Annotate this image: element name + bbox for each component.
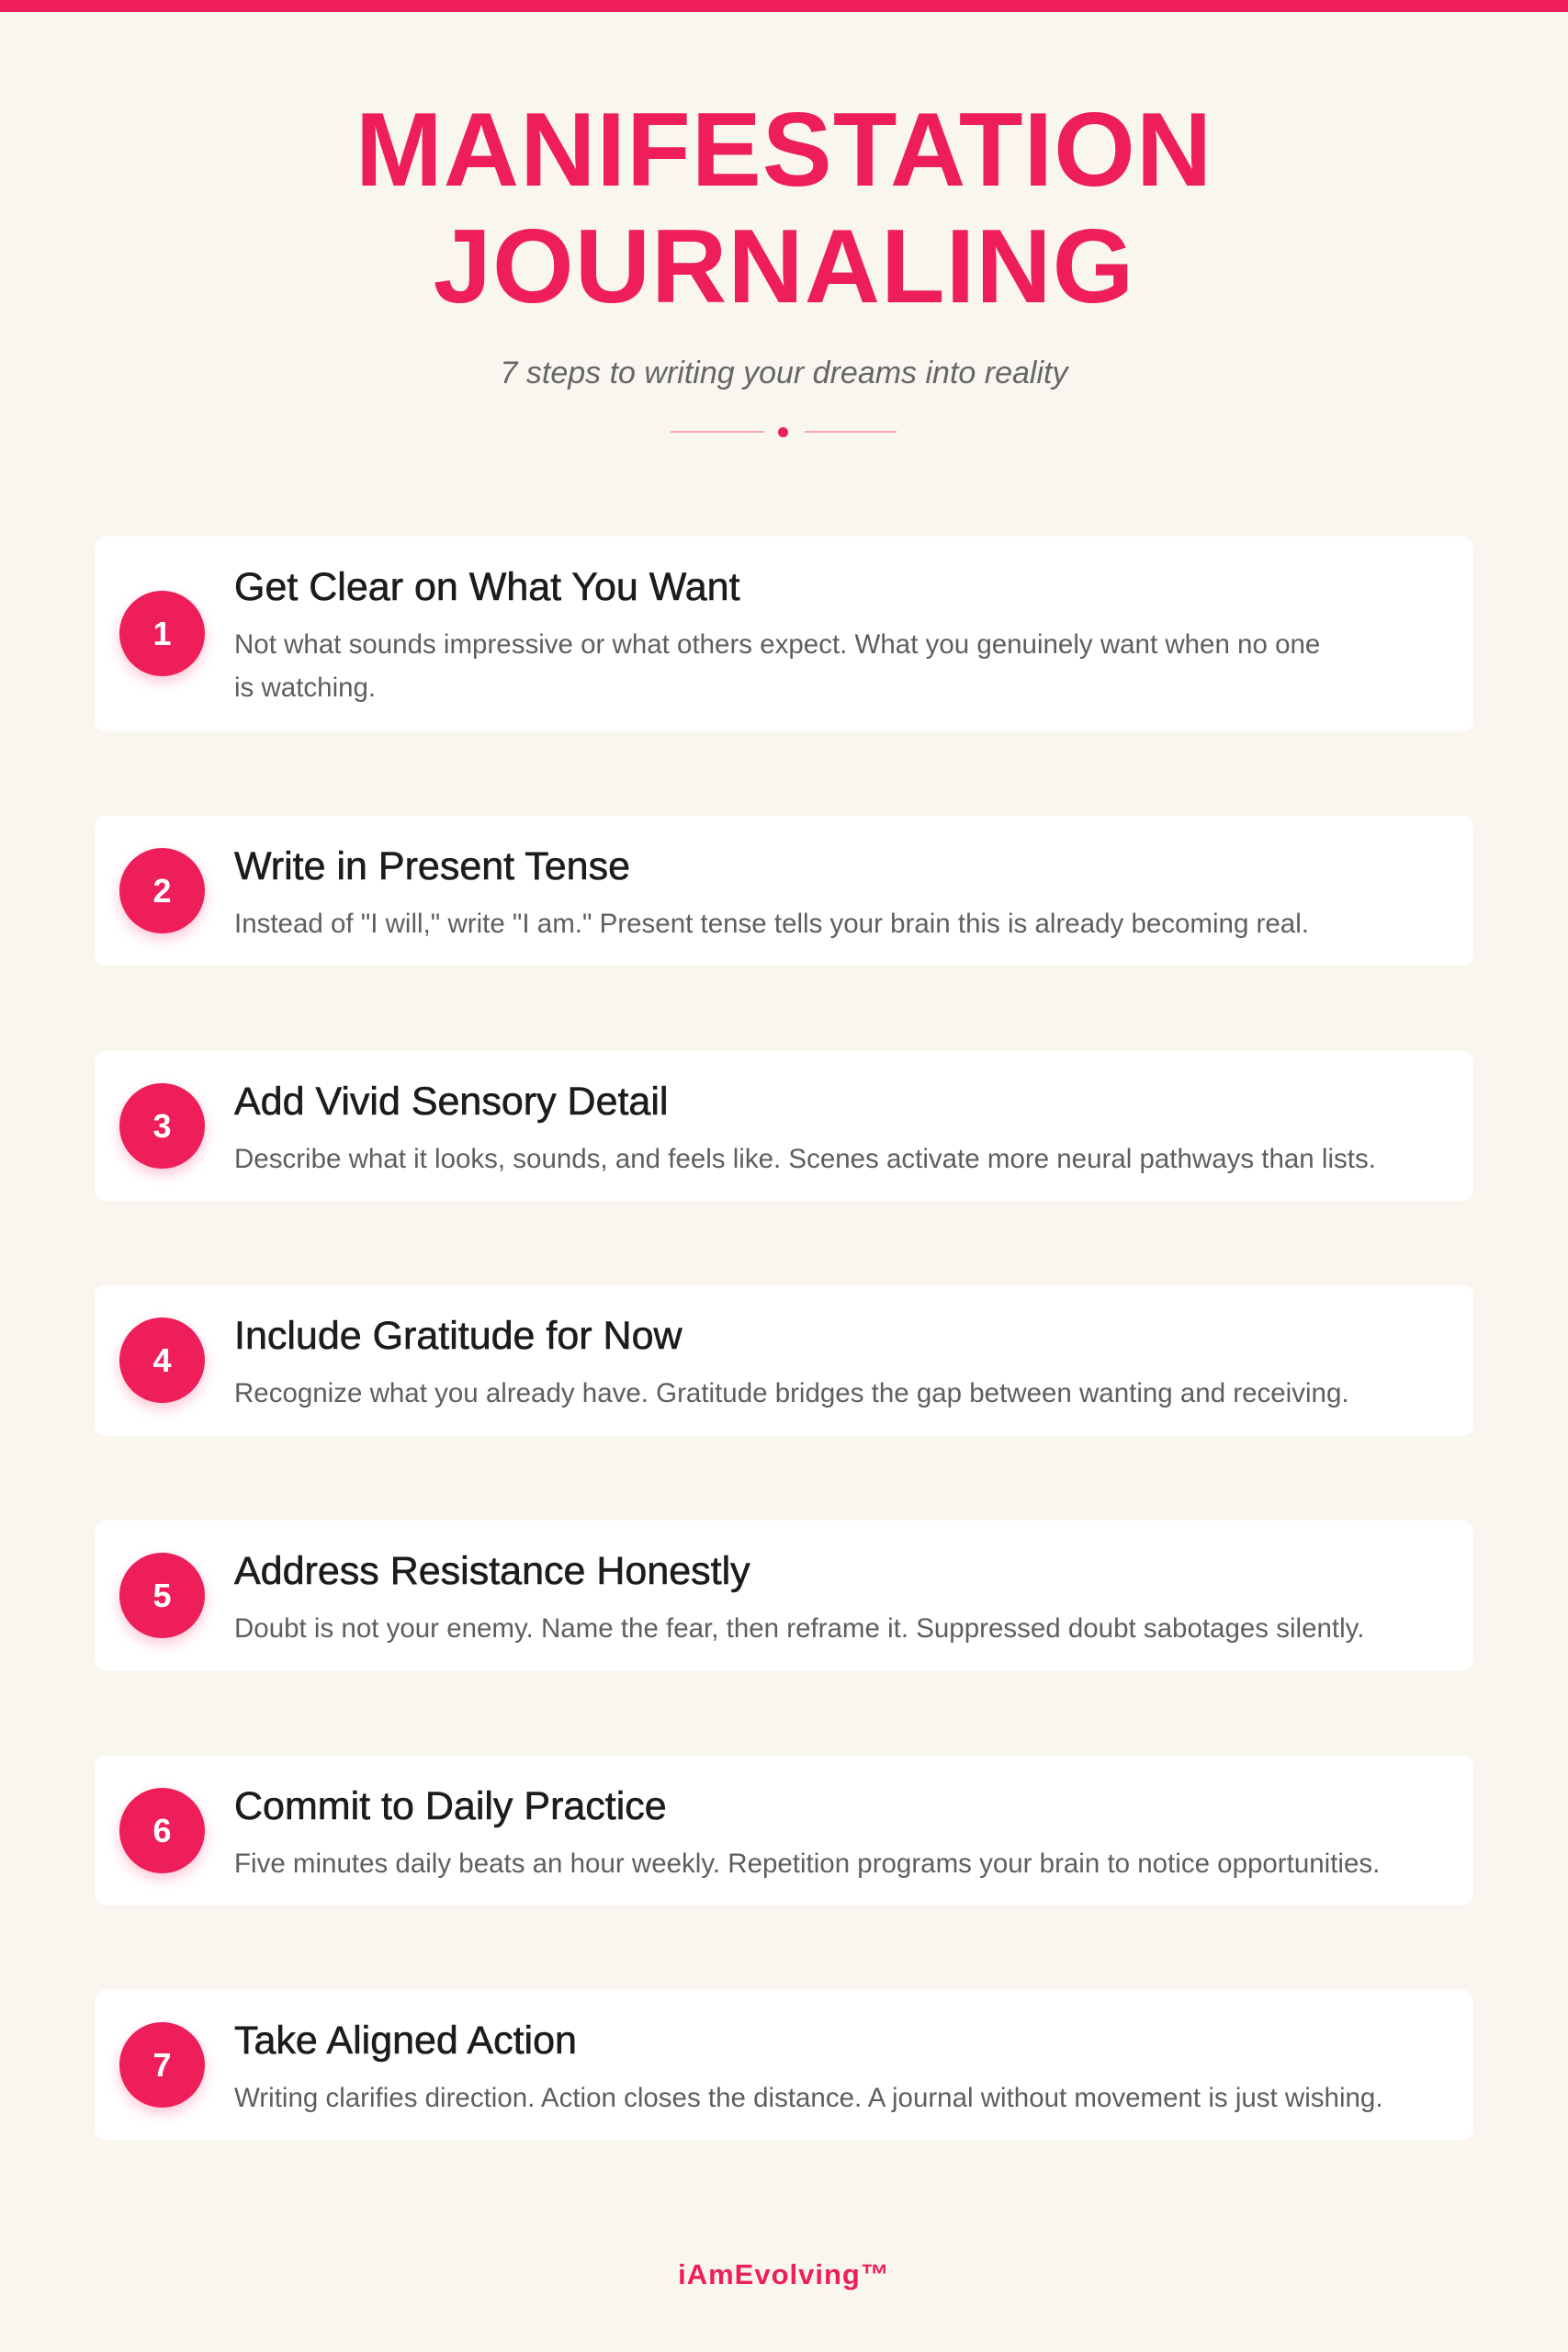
heading 4: Include Gratitude for Now (234, 1314, 682, 1358)
number 7: 7 (152, 2045, 172, 2084)
top bar (0, 0, 1568, 12)
title: MANIFESTATION (355, 92, 1213, 209)
text 1: Not what sounds impressive or what others expect. What you genuinely want when no one (234, 629, 1320, 660)
number 4: 4 (152, 1341, 172, 1378)
card 1 (95, 537, 1473, 731)
text 2: Instead of "I will," write "I am." Present tense tells your brain this is already becoming real. (234, 909, 1309, 939)
heading 3: Add Vivid Sensory Detail (234, 1080, 668, 1124)
number 6: 6 (152, 1812, 172, 1849)
number 2 (119, 848, 205, 933)
heading 1: Get Clear on What You Want (234, 565, 740, 609)
number 6 (119, 1788, 205, 1873)
text 5: Doubt is not your enemy. Name the fear, then reframe it. Suppressed doubt sabotages silently. (234, 1613, 1364, 1644)
card 3 (95, 1051, 1473, 1201)
number 2: 2 (152, 871, 172, 910)
number 3: 3 (152, 1106, 172, 1145)
footer brand: iAmEvolving™ (678, 2258, 890, 2290)
card 6 (95, 1756, 1473, 1905)
heading 5: Address Resistance Honestly (234, 1549, 750, 1593)
number 1 (119, 591, 205, 676)
card 2 (95, 816, 1473, 966)
card 5 (95, 1521, 1473, 1670)
divider ornament (671, 427, 897, 437)
title (355, 92, 1213, 325)
heading 7: Take Aligned Action (234, 2018, 577, 2063)
number 4 (119, 1317, 205, 1403)
card 7 (95, 1990, 1473, 2140)
number 5 (119, 1553, 205, 1638)
text 1 (234, 629, 1320, 703)
number 7 (119, 2022, 205, 2108)
text 4: Recognize what you already have. Gratitude bridges the gap between wanting and receiving. (234, 1378, 1349, 1408)
number 5: 5 (152, 1577, 172, 1613)
number 1: 1 (152, 614, 172, 652)
heading 6: Commit to Daily Practice (234, 1784, 667, 1828)
subtitle: 7 steps to writing your dreams into reality (501, 356, 1067, 390)
text 1: is watching. (234, 673, 376, 703)
card 4 (95, 1285, 1473, 1436)
title: JOURNALING (434, 209, 1134, 325)
number 3 (119, 1083, 205, 1169)
text 7: Writing clarifies direction. Action closes the distance. A journal without movement is just wishing. (234, 2083, 1383, 2113)
text 6: Five minutes daily beats an hour weekly. Repetition programs your brain to notice opportunities. (234, 1849, 1380, 1879)
text 3: Describe what it looks, sounds, and feels like. Scenes activate more neural pathways than lists. (234, 1144, 1376, 1174)
heading 2: Write in Present Tense (234, 844, 630, 888)
